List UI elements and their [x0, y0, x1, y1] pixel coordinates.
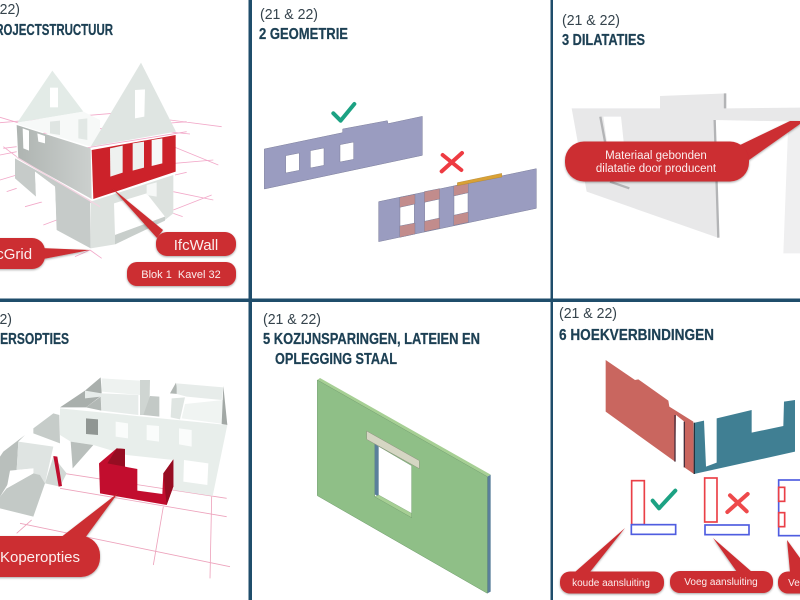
lintel [367, 431, 419, 469]
heading 3: 3 DILATATIES [562, 32, 645, 49]
panel: 6 hoekverbindingen [559, 306, 800, 594]
detail: third joint [779, 480, 800, 536]
left block [33, 413, 60, 443]
number label 2: (21 & 22) [260, 7, 318, 23]
callout: koude aansluiting: koude aansluiting [572, 578, 650, 589]
front wall [60, 408, 227, 496]
back rooms [60, 377, 102, 407]
number label 6: (21 & 22) [559, 306, 617, 322]
icon: check mark [653, 491, 675, 508]
heading 6: 6 HOEKVERBINDINGEN [559, 327, 714, 344]
wall diagrams [264, 104, 536, 242]
callout: dilatatie: Materiaal gebonden [605, 150, 707, 162]
panel: 1 projectstructuur [0, 2, 236, 286]
callout: koude aansluiting [560, 528, 664, 594]
panel: 4 kopersopties [0, 312, 230, 578]
house illustration [0, 63, 222, 258]
callout: IfcGrid [0, 238, 90, 269]
heading 2: 2 GEOMETRIE [259, 26, 348, 43]
red wall detail [53, 456, 62, 487]
callout: Blok 1 Kavel 32: Blok 1 Kavel 32 [141, 269, 221, 281]
callout: third: Ve [788, 578, 800, 589]
icon: cross [727, 494, 748, 512]
icon: check mark [333, 104, 354, 121]
callout: Koperopties [0, 493, 118, 577]
callout: Koperopties: Koperopties [0, 549, 80, 566]
callout: Voeg aansluiting: Voeg aansluiting [684, 577, 758, 588]
icon: cross [442, 153, 462, 171]
red wall option [99, 448, 173, 505]
detail: cold joint [631, 481, 676, 534]
callout: IfcWall [112, 188, 236, 256]
callout: Blok 1 Kavel 32 [127, 262, 236, 286]
pink wall [606, 360, 694, 474]
floor plan illustration [0, 377, 230, 578]
callout: dilatatie [565, 121, 800, 182]
correct wall [264, 116, 422, 189]
wall illustration [572, 93, 800, 253]
callout: dilatatie: dilatatie door producent [596, 163, 717, 175]
green wall illustration [317, 378, 491, 593]
callout: IfcWall: IfcWall [174, 237, 218, 254]
teal wall [694, 400, 795, 474]
callout: third [778, 540, 800, 594]
corner illustration [606, 360, 800, 536]
heading 5 second line: OPLEGGING STAAL [275, 351, 397, 368]
detail: joint [705, 478, 749, 535]
number label 5: (21 & 22) [263, 312, 321, 328]
callout: Voeg aansluiting [670, 538, 773, 593]
panel: 3 dilataties [562, 13, 800, 253]
heading 5: 5 KOZIJNSPARINGEN, LATEIEN EN [263, 331, 480, 348]
panel: 5 kozijnsparingen [263, 312, 491, 593]
panel: 2 geometrie [259, 7, 536, 242]
number label 3: (21 & 22) [562, 13, 620, 29]
wrong wall [379, 169, 536, 242]
strip [457, 173, 502, 186]
